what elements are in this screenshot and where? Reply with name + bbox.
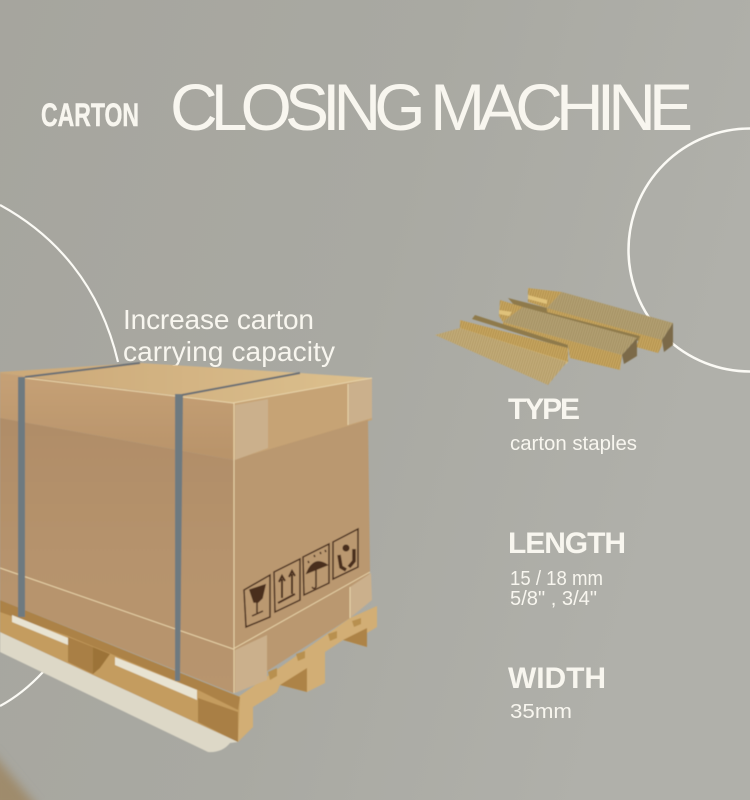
- spec: length: LENGTH: [508, 527, 626, 560]
- icon: handle with care: [333, 529, 358, 579]
- pallet: blocks: [68, 637, 238, 742]
- illustration: carton staples: [435, 288, 673, 385]
- callout: increase carton carrying capacity: Increase carton: [123, 304, 314, 335]
- staple strip: front: [435, 315, 568, 385]
- lid side: [233, 378, 372, 460]
- pallet: side deck: [238, 606, 377, 742]
- pallet: board ends: [268, 618, 361, 680]
- title: closing machine: CLOSING MACHINE: [170, 70, 693, 144]
- staple strip: back: [508, 288, 673, 353]
- icon: this way up: [274, 559, 300, 612]
- title: carton: CARTON: [41, 97, 139, 133]
- pallet: side block faces: [280, 628, 367, 692]
- decorative circle: right: [628, 128, 750, 372]
- lid front: [0, 373, 233, 460]
- box light edges: [0, 378, 372, 693]
- decorative arc: left lower: [0, 672, 43, 706]
- callout: increase carton carrying capacity: carrying capacity: [123, 336, 335, 367]
- box front: [0, 418, 233, 693]
- lid top: [0, 363, 372, 403]
- pallet: gaps: [12, 615, 197, 700]
- icon: keep dry: [303, 544, 329, 595]
- icons: handling marks: [244, 529, 358, 627]
- illustration: carton on pallet: [0, 363, 377, 752]
- spec: type: [508, 393, 637, 455]
- spec: length: [508, 527, 626, 610]
- spec: length: 15 / 18 mm: [510, 568, 603, 590]
- corner shadow: [0, 750, 40, 800]
- icon: fragile glass: [244, 575, 270, 627]
- pallet: top board: [0, 600, 240, 710]
- spec: type: carton staples: [510, 433, 637, 455]
- spec: type: TYPE: [508, 393, 580, 426]
- decorative arc: left upper: [0, 205, 118, 362]
- spec: width: [508, 662, 606, 723]
- box side: [233, 420, 370, 693]
- corner guards: [235, 378, 372, 693]
- spec: length: 5/8" , 3/4": [510, 588, 597, 610]
- pallet: front deck: [0, 603, 240, 742]
- straps: [18, 363, 300, 681]
- callout: increase carton carrying capacity: [123, 304, 335, 367]
- spec: width: WIDTH: [508, 662, 606, 695]
- staple strip: middle: [499, 300, 637, 370]
- spec: width: 35mm: [510, 701, 572, 723]
- pallet shadow: [0, 632, 238, 752]
